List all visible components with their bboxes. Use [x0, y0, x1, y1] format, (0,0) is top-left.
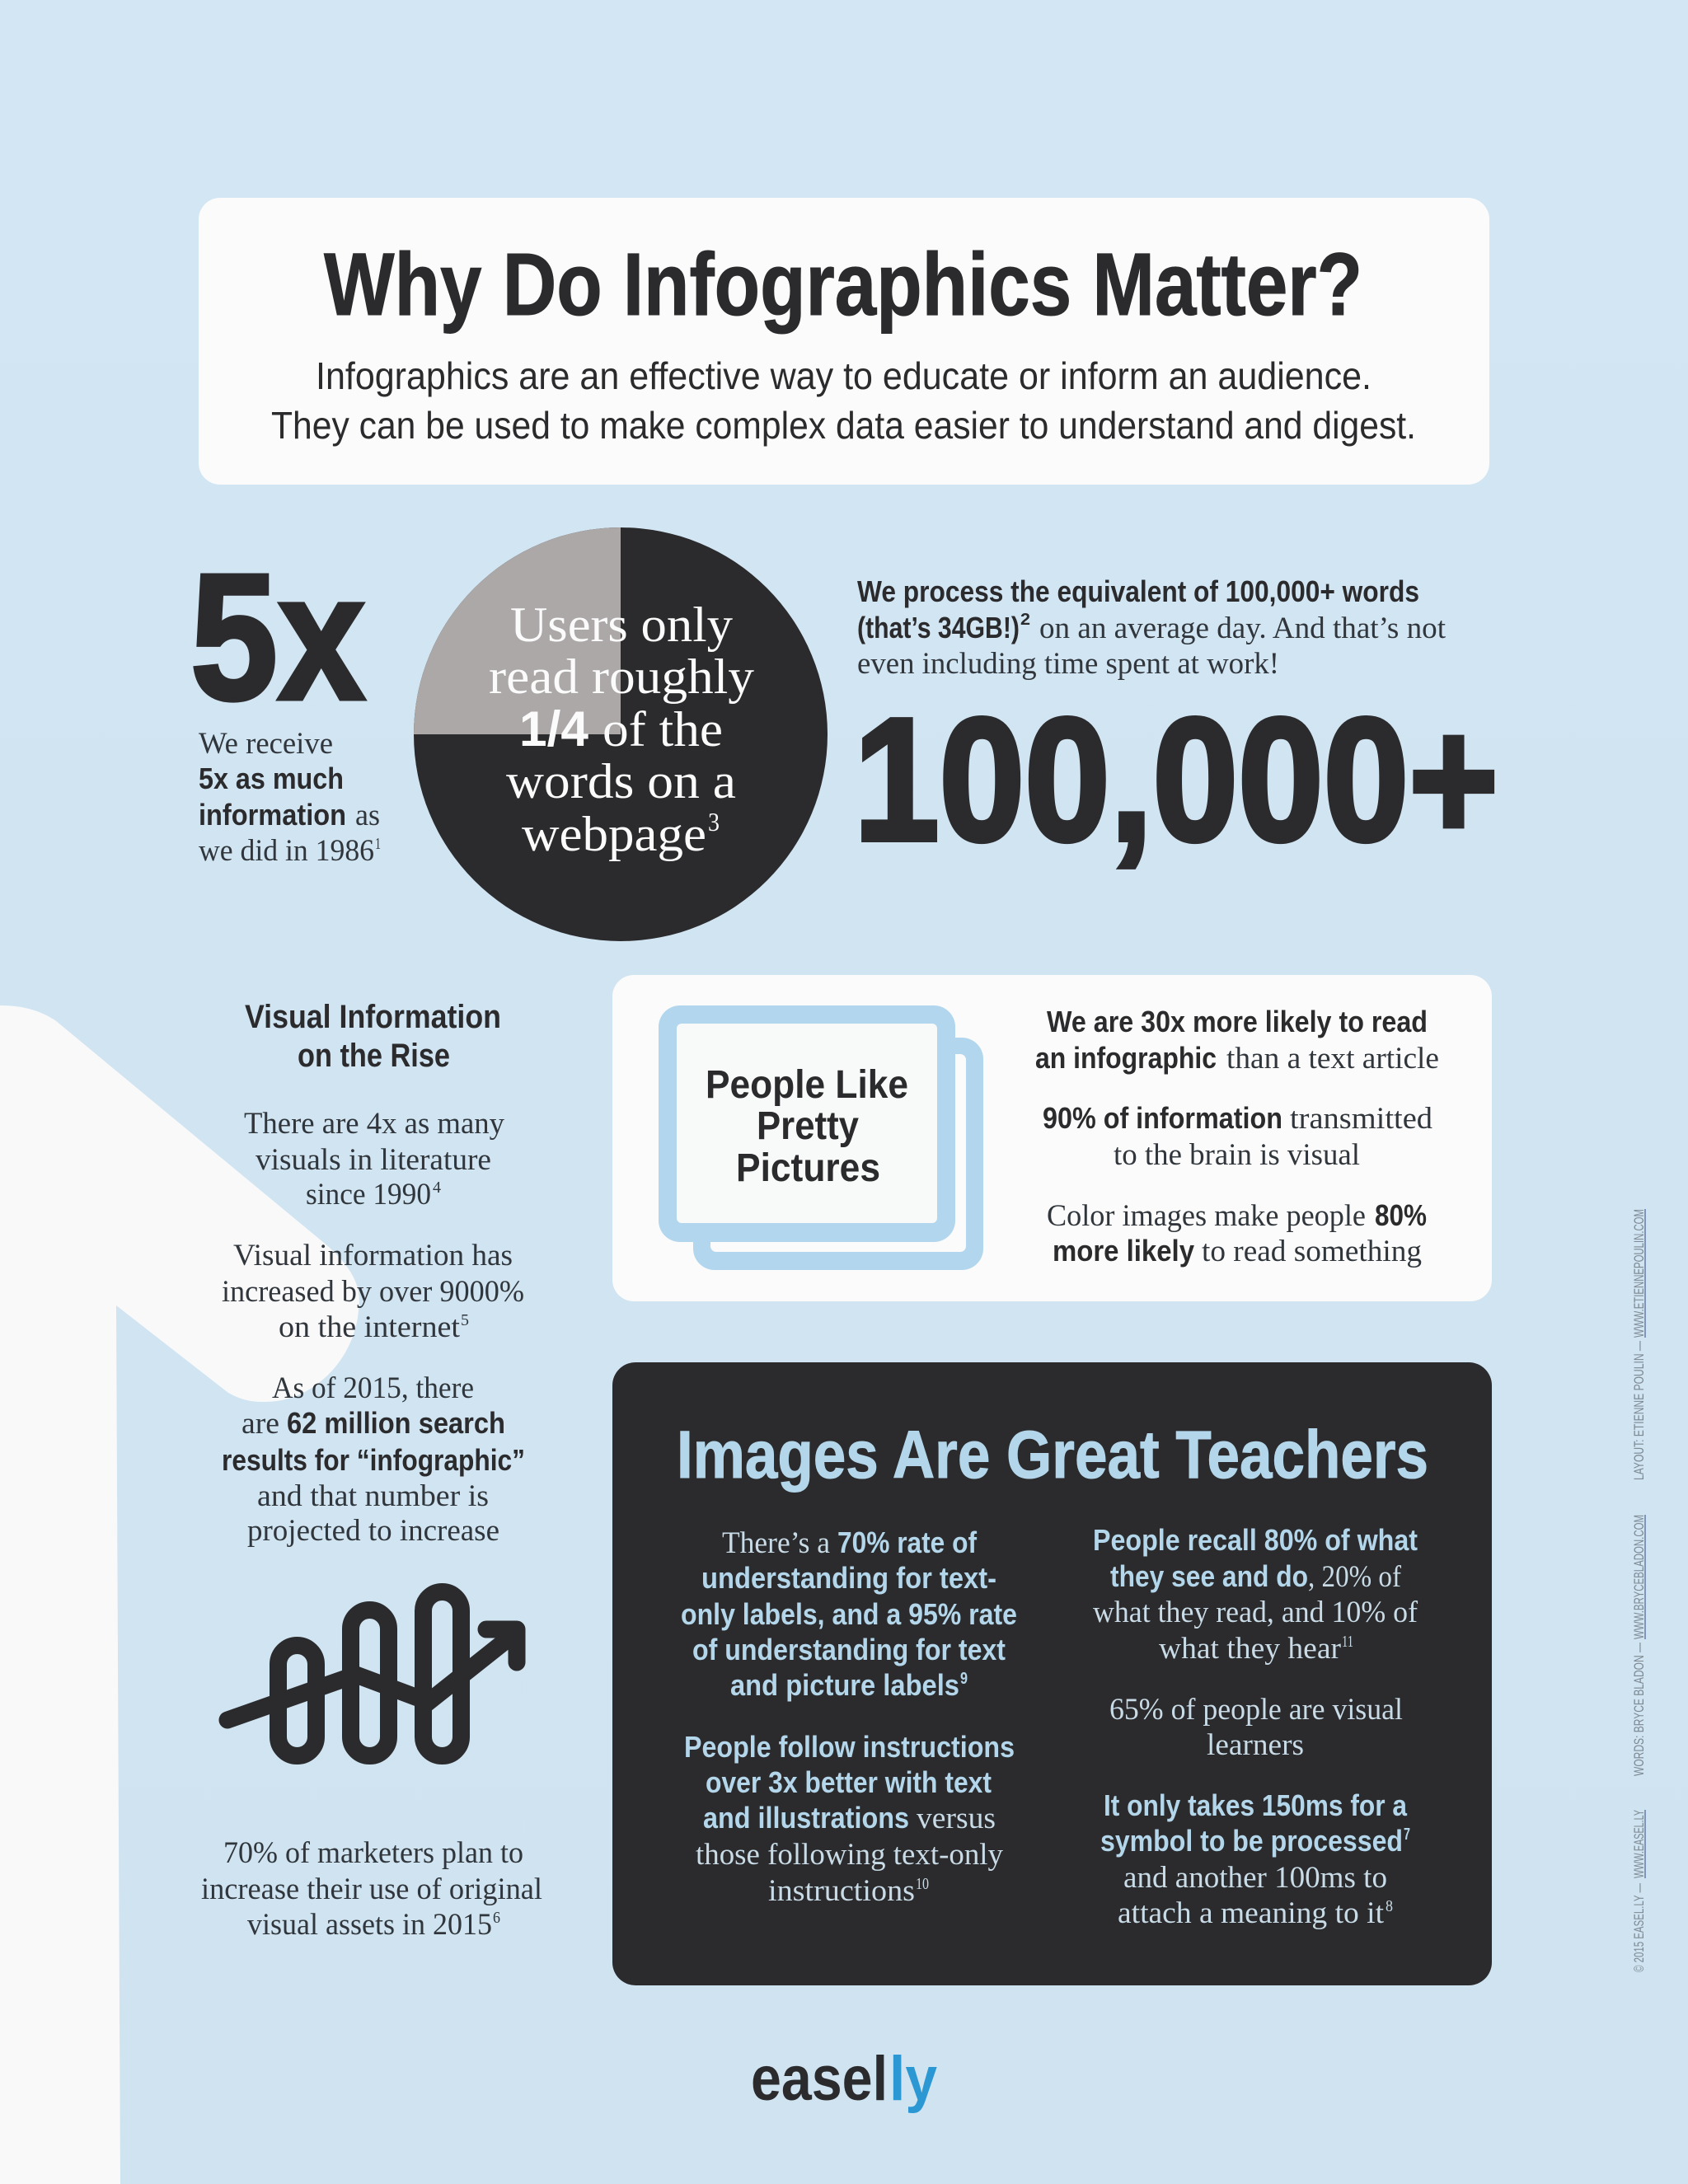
- stat: 100,000+: 100,000+: [854, 682, 1498, 877]
- text block: pie label: [489, 598, 754, 861]
- text block: pie label: 3: [708, 807, 720, 837]
- logo: easelly: easel: [751, 2044, 888, 2114]
- text block: marketers: 6: [493, 1909, 500, 1927]
- credits: vertical text: LAYOUT: ETIENNE POULIN —: [1631, 1341, 1647, 1480]
- background white arrow shape: [0, 1005, 359, 2184]
- text block: color images: more likely: [1053, 1234, 1194, 1268]
- text block: 30x more likely: We are 30x more likely to read: [1047, 1005, 1428, 1038]
- text block: visual information on the rise: are: [241, 1407, 279, 1441]
- text block: visual learners: learners: [1207, 1728, 1304, 1762]
- text block: recall: People recall 80% of what: [1093, 1523, 1418, 1557]
- text block: follow instructions: 10: [916, 1875, 929, 1893]
- credits: vertical text: WORDS: BRYCE BLADON —: [1631, 1643, 1647, 1776]
- heading: people like pretty pictures: Pictures: [736, 1146, 880, 1190]
- text block: visual information on the rise: on the internet: [279, 1310, 461, 1344]
- text block: rate of understanding: understanding for text-: [701, 1561, 996, 1595]
- text block: marketers: increase their use of original: [201, 1872, 542, 1906]
- text block: rate of understanding: There’s a: [722, 1526, 830, 1560]
- text block: recall: what they hear: [1159, 1632, 1341, 1666]
- text block: 5x description: we did in 1986: [199, 834, 374, 868]
- text block: 5x description: 5x as much: [199, 762, 344, 795]
- text block: follow instructions: those following text-only: [696, 1838, 1003, 1872]
- text block: follow instructions: People follow instructions: [684, 1730, 1015, 1764]
- text block: 150ms: attach a meaning to it: [1118, 1896, 1385, 1930]
- text block: marketers: 70% of marketers plan to: [223, 1836, 523, 1870]
- text block: 5x description: 1: [375, 835, 381, 853]
- heading: visual information: Visual Information: [245, 999, 501, 1035]
- text block: visual information on the rise: 5: [461, 1311, 469, 1329]
- text block: recall: [1093, 1523, 1418, 1666]
- text block: 100,000 words description: We process the equivalent of 100,000+ words: [857, 574, 1419, 608]
- text block: follow instructions: over 3x better with text: [706, 1765, 992, 1799]
- text block: recall: , 20% of: [1308, 1560, 1402, 1594]
- icon: stacked picture frames: [659, 1005, 983, 1270]
- text block: intro: Infographics are an effective way to educate or inform an audience.: [316, 354, 1372, 397]
- text block: color images: Color images make people: [1047, 1199, 1366, 1233]
- text block: visual information on the rise: results for “infographic”: [222, 1443, 525, 1477]
- text block: visual information on the rise: 62 million search: [287, 1406, 505, 1440]
- text block: pie label: webpage: [522, 807, 706, 861]
- text block: follow instructions: [684, 1730, 1015, 1908]
- text block: 5x description: [199, 727, 381, 868]
- text block: 5x description: We receive: [199, 727, 333, 761]
- text block: rate of understanding: and picture labels: [730, 1668, 959, 1702]
- text block: recall: 11: [1342, 1633, 1353, 1651]
- text block: pie label: Users only: [510, 598, 733, 652]
- text block: 5x description: as: [355, 799, 380, 832]
- text block: visual information on the rise: since 1990: [306, 1178, 431, 1212]
- heading: visual information: [245, 999, 501, 1074]
- credits: vertical text: © 2015 EASEL.LY —: [1631, 1883, 1647, 1972]
- text block: rate of understanding: only labels, and a 95% rate: [681, 1597, 1017, 1631]
- text block: visual information on the rise: visuals in literature: [256, 1143, 491, 1177]
- text block: marketers: visual assets in 2015: [247, 1908, 492, 1942]
- heading: main title: Why Do Infographics Matter?: [324, 234, 1362, 334]
- text block: visual learners: 65% of people are visual: [1109, 1693, 1403, 1727]
- text block: rate of understanding: [681, 1526, 1017, 1702]
- credits: vertical text: [1631, 1209, 1647, 1972]
- text block: visual information on the rise: There are 4x as many: [244, 1107, 504, 1141]
- text block: marketers: [201, 1836, 542, 1942]
- text block: 90% of information: [1043, 1101, 1433, 1172]
- text block: 150ms: 8: [1386, 1897, 1393, 1915]
- text block: pie label: of the: [603, 702, 723, 757]
- text block: follow instructions: instructions: [768, 1874, 915, 1908]
- text block: recall: what they read, and 10% of: [1093, 1596, 1418, 1629]
- text block: visual information on the rise: and that number is: [257, 1479, 489, 1513]
- text block: 100,000 words description: even including time spent at work!: [857, 647, 1279, 681]
- text block: recall: they see and do: [1110, 1559, 1308, 1593]
- text block: rate of understanding: 9: [960, 1670, 968, 1688]
- text block: pie label: words on a: [506, 754, 736, 808]
- heading: people like pretty pictures: People Like: [706, 1063, 908, 1107]
- text block: 30x more likely: than a text article: [1226, 1042, 1439, 1076]
- text block: 30x more likely: [1035, 1005, 1439, 1076]
- panel: images are great teachers: [612, 1362, 1492, 1985]
- text block: 150ms: 7: [1404, 1825, 1410, 1844]
- text block: visual learners: [1109, 1693, 1403, 1762]
- text block: 150ms: symbol to be processed: [1100, 1824, 1403, 1858]
- credits: vertical text: WWW.BRYCEBLADON.COM: [1631, 1515, 1647, 1639]
- text block: follow instructions: and illustrations: [703, 1801, 909, 1835]
- text block: color images: [1047, 1198, 1427, 1268]
- text block: 90% of information: 90% of information: [1043, 1101, 1282, 1135]
- text block: 150ms: [1100, 1788, 1410, 1930]
- heading: visual information: on the Rise: [298, 1038, 450, 1074]
- text block: pie label: read roughly: [489, 649, 754, 704]
- text block: rate of understanding: of understanding for text: [692, 1633, 1006, 1666]
- text block: 150ms: It only takes 150ms for a: [1104, 1788, 1408, 1822]
- logo: easelly: ly: [889, 2044, 937, 2114]
- text block: 100,000 words description: on an average day. And that’s not: [1039, 612, 1447, 645]
- credits: vertical text: WWW.ETIENNEPOULIN.COM: [1631, 1209, 1647, 1338]
- text block: intro: They can be used to make complex data easier to understand and digest.: [271, 404, 1416, 447]
- text block: 5x description: information: [199, 798, 346, 832]
- text block: 90% of information: to the brain is visual: [1114, 1138, 1360, 1172]
- text block: 30x more likely: an infographic: [1035, 1041, 1217, 1075]
- stat: 5x: [190, 537, 381, 868]
- text block: pie label: 1/4: [519, 701, 589, 757]
- text block: visual information on the rise: [222, 999, 525, 1548]
- text block: 150ms: and another 100ms to: [1123, 1861, 1387, 1895]
- panel: title: [199, 198, 1489, 485]
- text block: visual information on the rise: Visual information has: [233, 1239, 513, 1272]
- text block: 90% of information: transmitted: [1290, 1102, 1433, 1136]
- text block: follow instructions: versus: [917, 1802, 996, 1835]
- text block: visual information on the rise: increased by over 9000%: [222, 1275, 524, 1309]
- text block: visual information on the rise: projected to increase: [247, 1514, 499, 1548]
- text block: 100,000 words description: (that’s 34GB!): [857, 611, 1020, 644]
- pie chart: quarter of words: [414, 527, 828, 941]
- heading: people like pretty pictures: Pretty: [757, 1104, 859, 1148]
- text block: color images: to read something: [1202, 1235, 1422, 1268]
- heading: images are great teachers: Images Are Great Teachers: [677, 1418, 1428, 1493]
- text block: color images: 80%: [1375, 1198, 1427, 1232]
- text block: intro: [271, 354, 1416, 447]
- panel: people like pretty pictures: [612, 975, 1492, 1301]
- heading: people like pretty pictures: [706, 1063, 908, 1190]
- text block: 100,000 words description: [857, 574, 1447, 681]
- text block: visual information on the rise: As of 2015, there: [272, 1371, 474, 1405]
- text block: visual information on the rise: 4: [433, 1179, 441, 1197]
- credits: vertical text: WWW.EASEL.LY: [1631, 1810, 1647, 1878]
- text block: rate of understanding: 70% rate of: [837, 1526, 978, 1559]
- stat: 5x: 5x: [190, 537, 365, 738]
- text block: 100,000 words description: 2: [1020, 611, 1030, 629]
- icon: rising arrow through loops: [227, 1592, 517, 1755]
